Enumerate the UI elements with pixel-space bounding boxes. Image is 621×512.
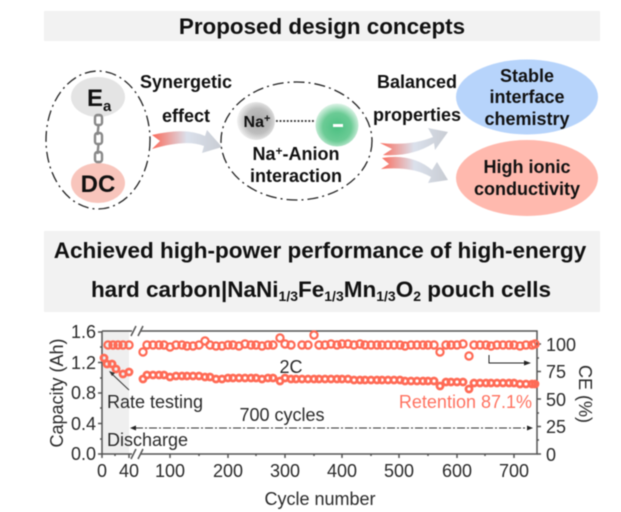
panel: Na+-anion interaction: + — [276, 144, 283, 158]
callout: stable interface chemistry: interface — [489, 87, 565, 107]
panel: Ea and DC coupling: DC — [81, 171, 115, 198]
panel: Na+-anion interaction: Na — [252, 144, 276, 164]
heading banner: achieved performance: 1/3 — [376, 288, 396, 304]
callout: stable interface chemistry — [456, 60, 598, 134]
y axis left labels: 0.8 — [71, 383, 96, 403]
series: coulombic efficiency — [104, 331, 539, 360]
callout: stable interface chemistry: Stable — [500, 66, 554, 86]
label: synergetic effect — [140, 72, 232, 126]
series: discharge capacity — [101, 355, 538, 392]
callout: high ionic conductivity: conductivity — [474, 179, 580, 199]
label: balanced properties: Balanced — [377, 72, 457, 92]
heading banner: achieved performance: O — [396, 277, 413, 302]
x axis labels: 100 — [155, 461, 185, 481]
heading banner: achieved performance: hard carbon|NaNi — [91, 277, 279, 302]
y axis left labels — [71, 322, 96, 464]
label: synergetic effect: effect — [162, 106, 210, 126]
heading banner: achieved performance: 1/3 — [279, 288, 298, 304]
callout: stable interface chemistry: chemistry — [484, 109, 570, 129]
panel: Na+-anion interaction: -Anion — [283, 144, 340, 164]
annotation: rate testing: Rate testing — [107, 392, 203, 412]
y axis left labels: 0.0 — [71, 444, 96, 464]
panel: Na+-anion interaction — [221, 82, 372, 200]
x axis labels: 700 — [499, 461, 529, 481]
x axis labels: 40 — [119, 461, 139, 481]
label: synergetic effect: Synergetic — [140, 72, 232, 92]
panel: Na+-anion interaction: interaction — [250, 166, 342, 186]
y axis left labels: 0.4 — [71, 414, 96, 434]
y axis right labels: 100 — [546, 335, 576, 355]
chart: capacity and CE versus cycle number — [47, 322, 595, 509]
label: balanced properties: properties — [373, 105, 461, 125]
y axis title: CE: CE (%) — [575, 365, 595, 423]
x axis title: Cycle number — [264, 489, 376, 509]
arrow: to high ionic conductivity — [381, 157, 448, 183]
panel: Ea and DC coupling: a — [103, 98, 112, 115]
callout: high ionic conductivity — [456, 140, 598, 216]
x axis labels: 300 — [270, 461, 300, 481]
y axis title: capacity: Capacity (Ah) — [47, 338, 67, 448]
callout: high ionic conductivity: High ionic — [484, 157, 570, 177]
x axis labels: 200 — [213, 461, 243, 481]
heading banner: achieved performance: pouch cells — [421, 277, 551, 302]
annotation: rate testing — [107, 371, 203, 412]
y axis right labels: 25 — [546, 417, 566, 437]
x axis labels — [97, 461, 529, 481]
heading banner: proposed design concepts: Proposed design concepts — [179, 14, 465, 39]
axes frame — [98, 326, 541, 459]
x axis labels: 400 — [327, 461, 357, 481]
arrow: 700 cycles span — [130, 426, 533, 430]
icon: Na+ sphere: + — [264, 113, 270, 125]
icon: chain — [95, 115, 102, 162]
x axis labels: 0 — [97, 461, 107, 481]
annotation: retention: Retention 87.1% — [399, 392, 532, 412]
arrow: to stable interface chemistry — [380, 128, 448, 155]
rate testing band — [102, 332, 129, 454]
label: balanced properties — [373, 72, 461, 125]
x axis labels: 500 — [384, 461, 414, 481]
heading banner: proposed design concepts — [44, 11, 600, 41]
y axis left labels: 1.6 — [71, 322, 96, 342]
icon: Na+ sphere: Na — [244, 114, 264, 131]
heading banner: achieved performance: Mn — [344, 277, 376, 302]
y axis left labels: 1.2 — [71, 353, 96, 373]
panel: Ea and DC coupling — [46, 71, 150, 209]
icon: Na+ sphere — [237, 102, 275, 140]
panel: Ea and DC coupling: E — [87, 85, 103, 112]
heading banner: achieved performance — [44, 231, 600, 312]
heading banner: achieved performance: 2 — [413, 288, 421, 304]
heading banner: achieved performance: Fe — [298, 277, 324, 302]
icon: anion sphere — [316, 104, 358, 146]
annotation: 2C: 2C — [279, 357, 303, 377]
y axis right labels: 50 — [546, 390, 566, 410]
heading banner: achieved performance: Achieved high-power performance of high-energy — [54, 238, 587, 263]
y axis right labels: 0 — [546, 445, 556, 465]
arrow: synergetic effect — [152, 130, 222, 153]
y axis right labels: 75 — [546, 362, 566, 382]
heading banner: achieved performance: 1/3 — [324, 288, 344, 304]
arrow: CE axis pointer — [489, 355, 531, 366]
annotation: 700 cycles: 700 cycles — [239, 405, 325, 425]
y axis right labels — [546, 335, 576, 465]
annotation: discharge: Discharge — [107, 430, 188, 450]
x axis labels: 600 — [442, 461, 472, 481]
